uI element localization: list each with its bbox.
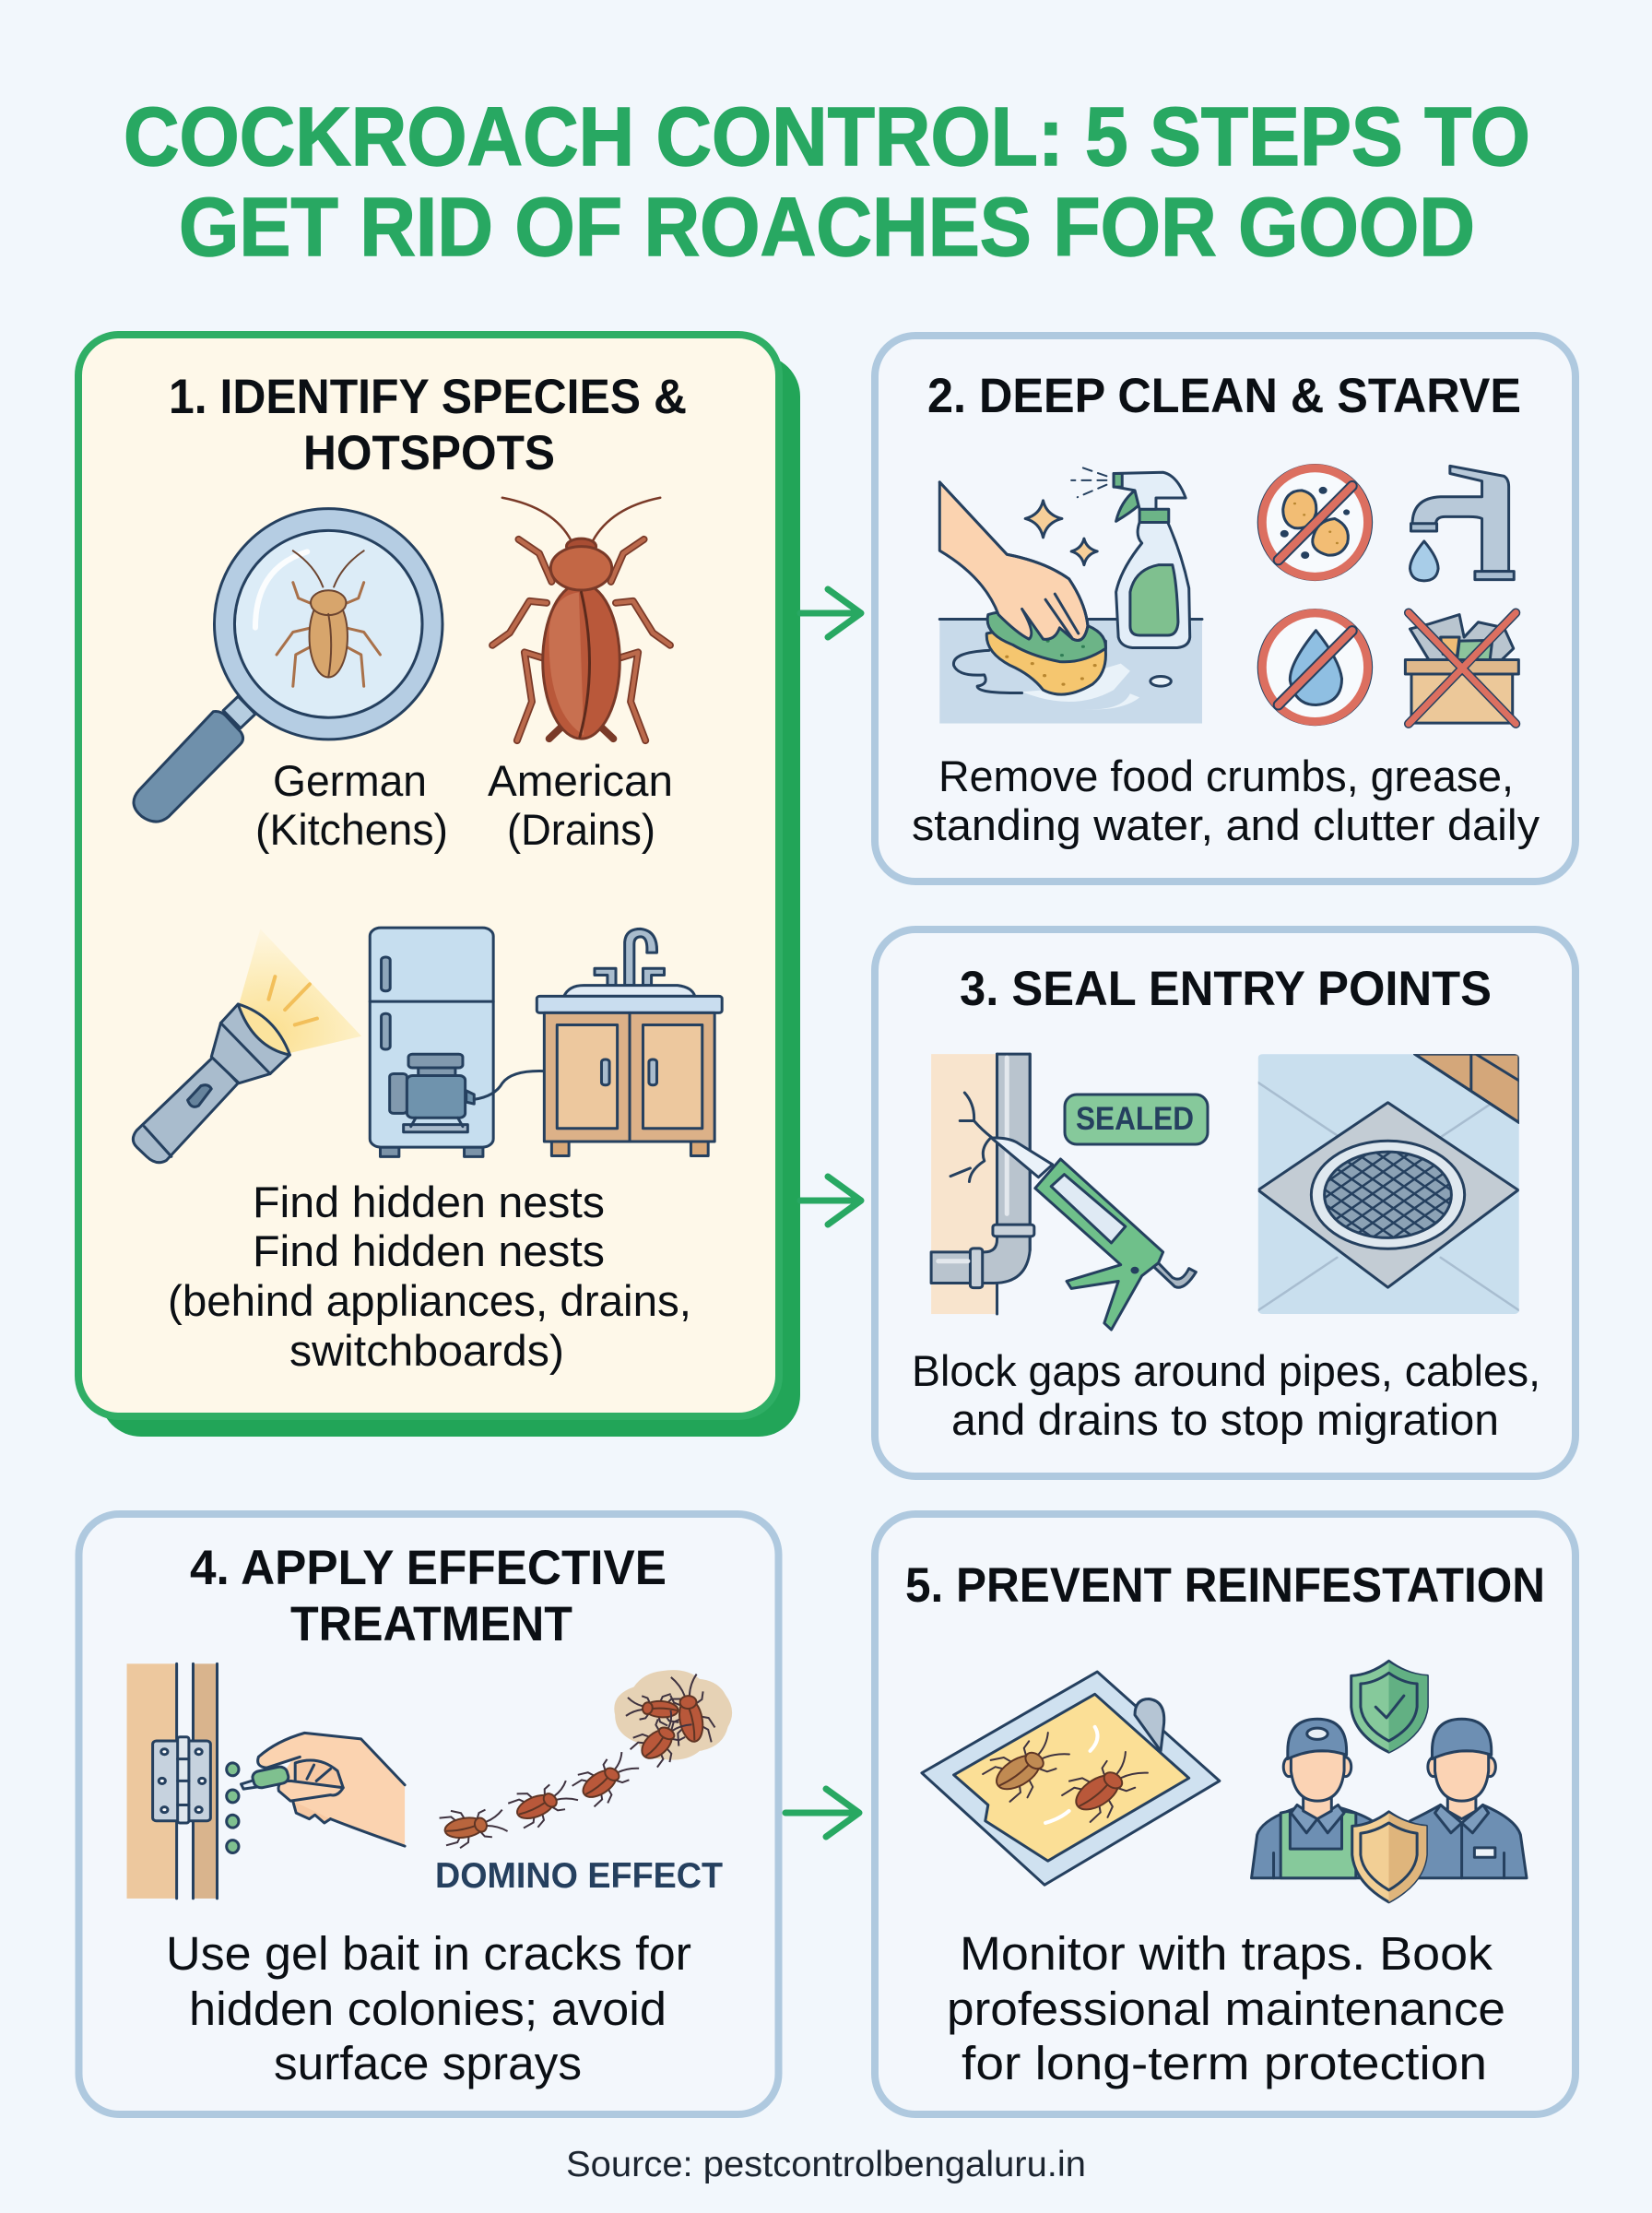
text: step 2 description: standing water, and clutter daily (912, 800, 1540, 849)
heading: step 2: 2. DEEP CLEAN & STARVE (927, 369, 1521, 423)
heading: step 1: HOTSPOTS (303, 426, 555, 480)
text: step 5 description: Monitor with traps. Book (960, 1927, 1493, 1980)
source line: Source: pestcontrolbengaluru.in (566, 2145, 1086, 2184)
text: step 4 description: hidden colonies; avoid (189, 1982, 667, 2035)
icon: SEALED badge (1065, 1095, 1208, 1144)
icon: gold shield (1352, 1812, 1426, 1902)
text: step 4 description: Use gel bait in cracks for (166, 1927, 691, 1980)
icon: green shield with check (1351, 1661, 1427, 1752)
icon: wall crack and pipe (931, 1054, 1034, 1314)
labels: species names: American (488, 756, 673, 805)
text: step 3 description (912, 1346, 1540, 1444)
icon: no food crumbs (1258, 466, 1372, 580)
icon: no standing water (1258, 610, 1372, 725)
arrow: step 1 to step 3 (800, 1177, 861, 1225)
labels: species names: German (273, 756, 427, 805)
icon: hand applying gel syringe (242, 1733, 405, 1846)
panel: step 5 prevent reinfestation (875, 1514, 1575, 2114)
text: hidden nests description (168, 1178, 691, 1375)
arrow: step 1 to step 2 (800, 589, 861, 637)
text: step 2 description: Remove food crumbs, grease, (938, 751, 1514, 800)
icon: refrigerator with motor (370, 928, 544, 1156)
panel: step 4 apply effective treatment (79, 1514, 778, 2114)
icon: sticky trap with roaches (922, 1672, 1220, 1885)
text: hidden nests description: (behind appliances, drains, (168, 1276, 691, 1325)
heading: step 1 (169, 370, 687, 480)
text: step 5 description: for long-term protection (962, 2037, 1487, 2089)
icon: magnifying glass with German cockroach (134, 509, 442, 822)
text: hidden nests description: Find hidden nests (253, 1226, 605, 1275)
text: step 5 description: professional maintenance (947, 1982, 1505, 2035)
icon: sink cabinet (537, 929, 722, 1155)
icon: door hinge (127, 1663, 218, 1899)
icon: American cockroach (492, 498, 670, 740)
text: step 4 description (166, 1927, 691, 2089)
icon: no clutter box (1405, 613, 1518, 724)
heading: step 3: 3. SEAL ENTRY POINTS (960, 962, 1492, 1016)
heading: step 1: 1. IDENTIFY SPECIES & (169, 370, 687, 424)
heading: step 4: 4. APPLY EFFECTIVE (190, 1541, 667, 1595)
icon: gel bait dots (227, 1763, 239, 1852)
heading: step 4 (190, 1541, 667, 1651)
labels: species names: (Drains) (507, 805, 655, 854)
arrow: step 4 to step 5 (785, 1789, 859, 1837)
text: hidden nests description: Find hidden nests (253, 1178, 605, 1226)
title: GET RID OF ROACHES FOR GOOD (179, 182, 1475, 274)
heading: step 5: 5. PREVENT REINFESTATION (905, 1558, 1545, 1613)
text: step 3 description: and drains to stop migration (951, 1395, 1499, 1444)
title: COCKROACH CONTROL: 5 STEPS TO (124, 91, 1530, 183)
labels: species names (255, 756, 673, 854)
panel: step 2 deep clean and starve (875, 336, 1575, 882)
icon: domino effect roaches (438, 1670, 732, 1851)
text: step 2 description (912, 751, 1540, 849)
icon: hand scrubbing counter with sponge and spray bottle (939, 466, 1202, 724)
icon: dripping faucet (1410, 466, 1514, 581)
icon: caulk gun (991, 1138, 1196, 1330)
labels: species names: (Kitchens) (255, 805, 448, 854)
heading: step 4: TREATMENT (290, 1597, 572, 1651)
text: hidden nests description: switchboards) (289, 1326, 564, 1375)
title (124, 91, 1530, 274)
text: step 3 description: Block gaps around pipes, cables, (912, 1346, 1540, 1395)
icon: floor drain (1258, 1054, 1519, 1331)
panel: step 3 seal entry points (875, 929, 1575, 1476)
text: step 4 description: surface sprays (274, 2037, 582, 2089)
text: step 5 description (947, 1927, 1505, 2089)
label: domino effect: DOMINO EFFECT (435, 1856, 723, 1896)
panel: step 1 identify species and hotspots (78, 335, 800, 1437)
icon: flashlight (133, 929, 361, 1163)
icon: two technicians (1252, 1719, 1527, 1878)
icon: SEALED badge: SEALED (1076, 1101, 1194, 1137)
